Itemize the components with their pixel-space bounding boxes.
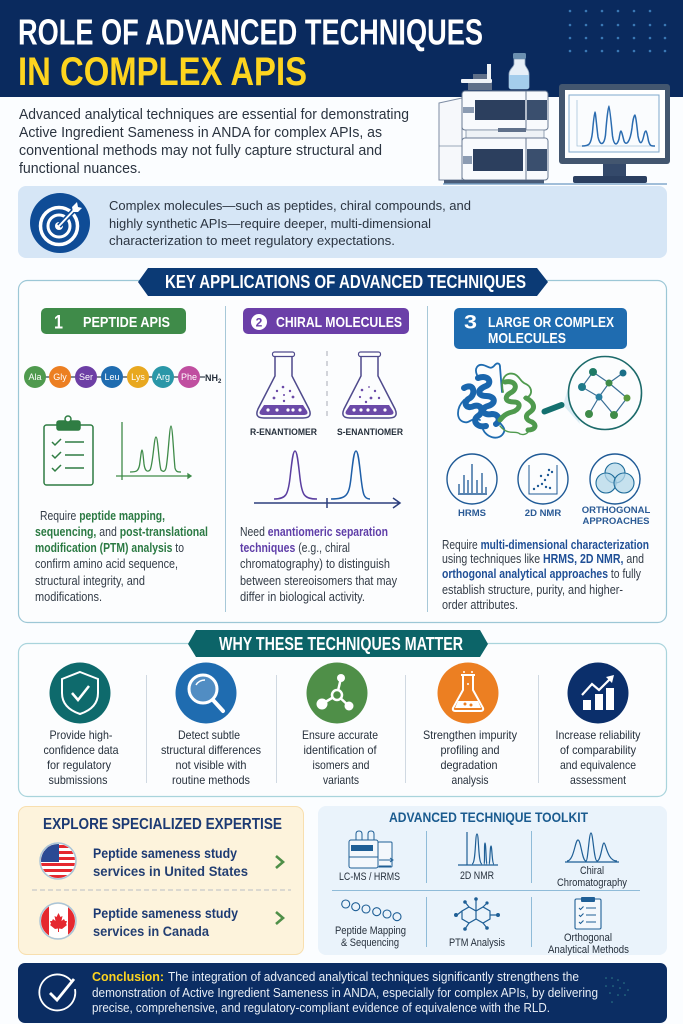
- conclusion text: The integration of advanced analytical techniques significantly strengthens the: [168, 969, 579, 984]
- tool: 2D NMR: 2D NMR: [460, 870, 494, 882]
- labels: technique icons: HRMS: [458, 508, 486, 519]
- tool: orthogonal analytical methods: Orthogonal: [564, 932, 612, 944]
- item: isomers: Ensure accurate: [302, 728, 378, 742]
- item: structural differences: routine methods: [172, 773, 250, 787]
- dividers: [225, 306, 428, 612]
- badge: chiral molecules: 2: [256, 316, 263, 330]
- icon: magnifier: [176, 662, 236, 724]
- tool: PTM analysis: [449, 897, 506, 949]
- intro text: Advanced analytical techniques are essential for demonstrating: [19, 107, 409, 123]
- item: comparability: and equivalence: [560, 758, 636, 772]
- chevron: [276, 856, 283, 868]
- badge: peptide APIs: [41, 308, 186, 334]
- icon: 2D NMR: [518, 454, 568, 504]
- tool: PTM analysis: PTM Analysis: [449, 937, 506, 949]
- text: peptide APIs: structural integrity, and: [35, 574, 145, 588]
- item: isomers: identification of: [304, 743, 377, 757]
- text: chiral molecules: differ in biological activity.: [240, 590, 365, 604]
- text: chiral molecules: Need enantiomeric separation: [240, 525, 388, 539]
- illustration: monitor with chromatogram: [559, 84, 670, 183]
- link: Canada: [93, 906, 238, 939]
- text: chiral molecules: [240, 525, 398, 604]
- illustration: protein structure: [458, 363, 535, 438]
- badge: large or complex molecules: LARGE OR COMPLEX: [488, 314, 614, 331]
- text: peptide APIs: modifications.: [35, 590, 102, 604]
- peptide chain: Phe: [181, 372, 197, 382]
- badge: chiral molecules: CHIRAL MOLECULES: [276, 314, 402, 331]
- heading: key applications: KEY APPLICATIONS OF ADVANCED TECHNIQUES: [165, 272, 526, 292]
- text: large or complex molecules: order attributes.: [442, 598, 518, 612]
- callout text: highly synthetic APIs—require deeper, multi-dimensional: [109, 216, 431, 231]
- badge: large or complex molecules: 3: [464, 312, 477, 334]
- shelf line: [443, 183, 667, 185]
- intro text: Active Ingredient Sameness in ANDA for complex APIs, as: [19, 125, 382, 141]
- badge: large or complex molecules: [454, 308, 627, 349]
- chart: chiral separation: [254, 451, 400, 508]
- icon: target: [30, 193, 90, 253]
- icon: R-enantiomer flask: [257, 352, 310, 418]
- icon: Canada flag: [40, 903, 77, 939]
- item: regulatory data: [44, 662, 119, 787]
- item: regulatory data: submissions: [48, 773, 108, 787]
- tool: LC-MS / HRMS: [339, 831, 400, 883]
- text: peptide APIs: confirm amino acid sequence,: [35, 557, 178, 571]
- tool: orthogonal analytical methods: Analytical Methods: [548, 944, 630, 956]
- peptide chain: Leu: [104, 372, 120, 382]
- heading: key applications: [138, 268, 548, 296]
- item: structural differences: not visible with: [176, 758, 246, 772]
- icon: molecule: [306, 662, 368, 724]
- peptide chain: NH: [205, 373, 218, 383]
- mirror line: [326, 351, 328, 419]
- title: IN COMPLEX APIS: [18, 50, 307, 94]
- item: impurity profiling: analysis: [452, 773, 488, 787]
- item: isomers: variants: [323, 773, 359, 787]
- tool: peptide mapping and sequencing: & Sequencing: [341, 937, 399, 949]
- tool: peptide mapping and sequencing: Peptide Mapping: [335, 925, 406, 937]
- text: peptide APIs: modification (PTM) analysis to: [35, 541, 184, 555]
- text: peptide APIs: Require peptide mapping,: [40, 509, 165, 523]
- badge: peptide APIs: 1: [54, 312, 63, 334]
- peptide chain: Ser: [79, 372, 93, 382]
- panel: advanced technique toolkit: [318, 806, 667, 956]
- icon: check circle: [39, 974, 75, 1010]
- tool: chiral chromatography: Chromatography: [557, 877, 628, 889]
- link: Canada: Peptide sameness study: [93, 906, 238, 921]
- link: Canada: services in Canada: [93, 924, 209, 939]
- labels: technique icons: ORTHOGONAL: [582, 505, 650, 516]
- item: regulatory data: Provide high-: [50, 728, 112, 742]
- text: chiral molecules: between stereoisomers that may: [240, 574, 398, 588]
- labels: enantiomers: [250, 427, 403, 438]
- panel: explore specialized expertise: [18, 806, 304, 954]
- item: comparability: Increase reliability: [556, 728, 640, 742]
- item: impurity profiling: profiling and: [440, 743, 500, 757]
- item: isomers: isomers and: [312, 758, 370, 772]
- panel: key applications: [18, 280, 666, 622]
- tool: 2D NMR: [458, 832, 498, 882]
- item: regulatory data: for regulatory: [47, 758, 111, 772]
- tool: orthogonal analytical methods: [548, 897, 630, 956]
- conclusion text: demonstration of Active Ingredient Sameness in ANDA, especially for complex APIs, by delivering: [92, 985, 598, 1000]
- icon: S-enantiomer flask: [343, 352, 396, 418]
- item: impurity profiling: [423, 662, 517, 787]
- peptide chain: Lys: [131, 372, 145, 382]
- panel: why these techniques matter: [18, 644, 666, 796]
- item: comparability: [556, 662, 640, 787]
- labels: enantiomers: S-ENANTIOMER: [337, 427, 403, 438]
- header banner: [0, 0, 683, 97]
- text: large or complex molecules: using techniques like HRMS, 2D NMR, and: [442, 552, 644, 566]
- text: large or complex molecules: [442, 538, 649, 612]
- intro text: [19, 107, 409, 177]
- item: impurity profiling: degradation: [440, 758, 498, 772]
- item: structural differences: Detect subtle: [178, 728, 240, 742]
- badge: peptide APIs: PEPTIDE APIS: [83, 314, 170, 331]
- badge: chiral molecules: [243, 308, 409, 334]
- title: ROLE OF ADVANCED TECHNIQUES: [18, 12, 483, 52]
- labels: enantiomers: R-ENANTIOMER: [250, 427, 317, 438]
- text: large or complex molecules: establish structure, purity, and higher-: [442, 583, 623, 597]
- text: peptide APIs: [35, 509, 208, 604]
- labels: technique icons: 2D NMR: [525, 508, 561, 519]
- labels: technique icons: [458, 505, 650, 527]
- peptide chain: Gly: [53, 372, 67, 382]
- badge: large or complex molecules: MOLECULES: [488, 330, 566, 347]
- illustration: magnified molecular network: [544, 356, 642, 430]
- tool: LC-MS / HRMS: LC-MS / HRMS: [339, 871, 400, 883]
- icon: shield: [50, 662, 110, 724]
- text: chiral molecules: chromatography) to distinguish: [240, 557, 390, 571]
- peptide chain: Ala: [28, 372, 42, 382]
- icon: flask: [438, 662, 498, 724]
- illustration: solvent bottle: [509, 53, 529, 89]
- icon: United States flag: [40, 843, 76, 879]
- peptide chain: Arg: [156, 372, 170, 382]
- conclusion text: precise, comprehensive, and regulatory-compliant evidence of equivalence with the RLD.: [92, 1000, 550, 1015]
- chevron: [276, 912, 283, 924]
- callout text: characterization to meet regulatory expectations.: [109, 233, 395, 248]
- icon: clipboard checklist: [44, 416, 93, 485]
- title: [18, 12, 483, 94]
- intro text: functional nuances.: [19, 161, 141, 177]
- icon: HRMS: [447, 454, 497, 504]
- item: isomers: [302, 662, 378, 787]
- labels: technique icons: APPROACHES: [582, 516, 650, 527]
- intro text: conventional methods may not fully capture structural and: [19, 143, 382, 159]
- link: United States: [93, 846, 248, 879]
- conclusion banner: [18, 963, 667, 1023]
- callout text: Complex molecules—such as peptides, chiral compounds, and: [109, 198, 471, 213]
- tool: chiral chromatography: Chiral: [580, 865, 604, 877]
- item: impurity profiling: Strengthen impurity: [423, 728, 517, 742]
- icon: rising bar chart: [568, 662, 628, 724]
- item: regulatory data: confidence data: [44, 743, 119, 757]
- icon: orthogonal approaches: [590, 454, 640, 504]
- conclusion text: [92, 969, 598, 1015]
- illustration: analytical instrument: [439, 64, 548, 184]
- heading: why these techniques matter: WHY THESE TECHNIQUES MATTER: [219, 634, 463, 654]
- item: comparability: assessment: [570, 773, 627, 787]
- dividers: [146, 675, 539, 783]
- item: structural differences: structural differences: [161, 743, 261, 757]
- conclusion text: Conclusion:: [92, 969, 164, 984]
- item: structural differences: [161, 662, 261, 787]
- link: United States: services in United States: [93, 864, 248, 879]
- tool: peptide mapping and sequencing: [335, 900, 406, 949]
- heading: explore: EXPLORE SPECIALIZED EXPERTISE: [43, 816, 282, 833]
- text: peptide APIs: sequencing, and post-translational: [35, 525, 208, 539]
- peptide chain: 2: [218, 379, 222, 385]
- item: comparability: of comparability: [560, 743, 636, 757]
- text: large or complex molecules: Require multi-dimensional characterization: [442, 538, 649, 552]
- callout: complex molecules: [18, 186, 667, 258]
- link: United States: Peptide sameness study: [93, 846, 237, 861]
- text: large or complex molecules: orthogonal analytical approaches to fully: [442, 567, 642, 581]
- callout text: [109, 198, 471, 248]
- heading: why these techniques matter: [188, 630, 488, 657]
- peptide chain: [24, 366, 222, 388]
- heading: toolkit: ADVANCED TECHNIQUE TOOLKIT: [389, 809, 588, 825]
- text: chiral molecules: techniques (e.g., chiral: [240, 541, 350, 555]
- tool: chiral chromatography: [557, 833, 628, 889]
- chart: peptide chromatogram: [116, 422, 191, 480]
